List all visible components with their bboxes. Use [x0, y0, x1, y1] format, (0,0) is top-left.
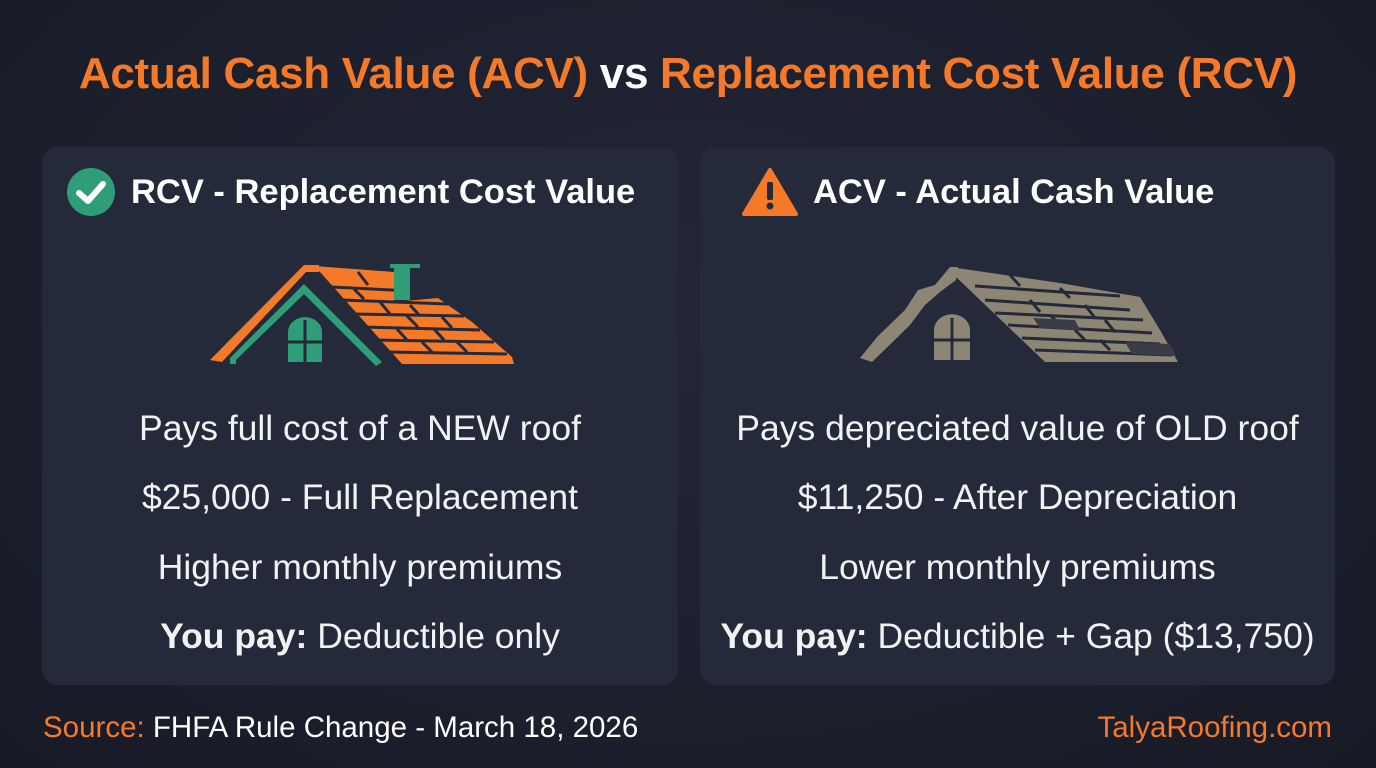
text: pays: Pays depreciated value of OLD roof [736, 408, 1299, 448]
text: premiums: Higher monthly premiums [158, 547, 562, 587]
icon: old roof [860, 267, 1178, 362]
panel: RCV [42, 147, 678, 685]
text: you pay: You pay: Deductible + Gap ($13,750) [720, 616, 1315, 656]
panel: ACV [700, 147, 1335, 685]
text: you pay: You pay: Deductible only [160, 616, 560, 656]
header: RCV: RCV - Replacement Cost Value [131, 172, 635, 210]
header: ACV [742, 168, 1214, 216]
text: premiums: Lower monthly premiums [819, 547, 1216, 587]
title: Actual Cash Value (ACV) vs Replacement Cost Value (RCV) [79, 49, 1297, 98]
text: amount: $11,250 - After Depreciation [798, 477, 1237, 517]
icon: warning [742, 168, 798, 216]
icon: green check [67, 168, 115, 216]
text: pays: Pays full cost of a NEW roof [139, 408, 581, 448]
text: amount: $25,000 - Full Replacement [142, 477, 578, 517]
footer: website: TalyaRoofing.com [1098, 711, 1332, 744]
footer: source: Source: FHFA Rule Change - March 18, 2026 [43, 711, 638, 744]
icon: new roof [210, 264, 514, 366]
header: ACV: ACV - Actual Cash Value [813, 172, 1214, 210]
